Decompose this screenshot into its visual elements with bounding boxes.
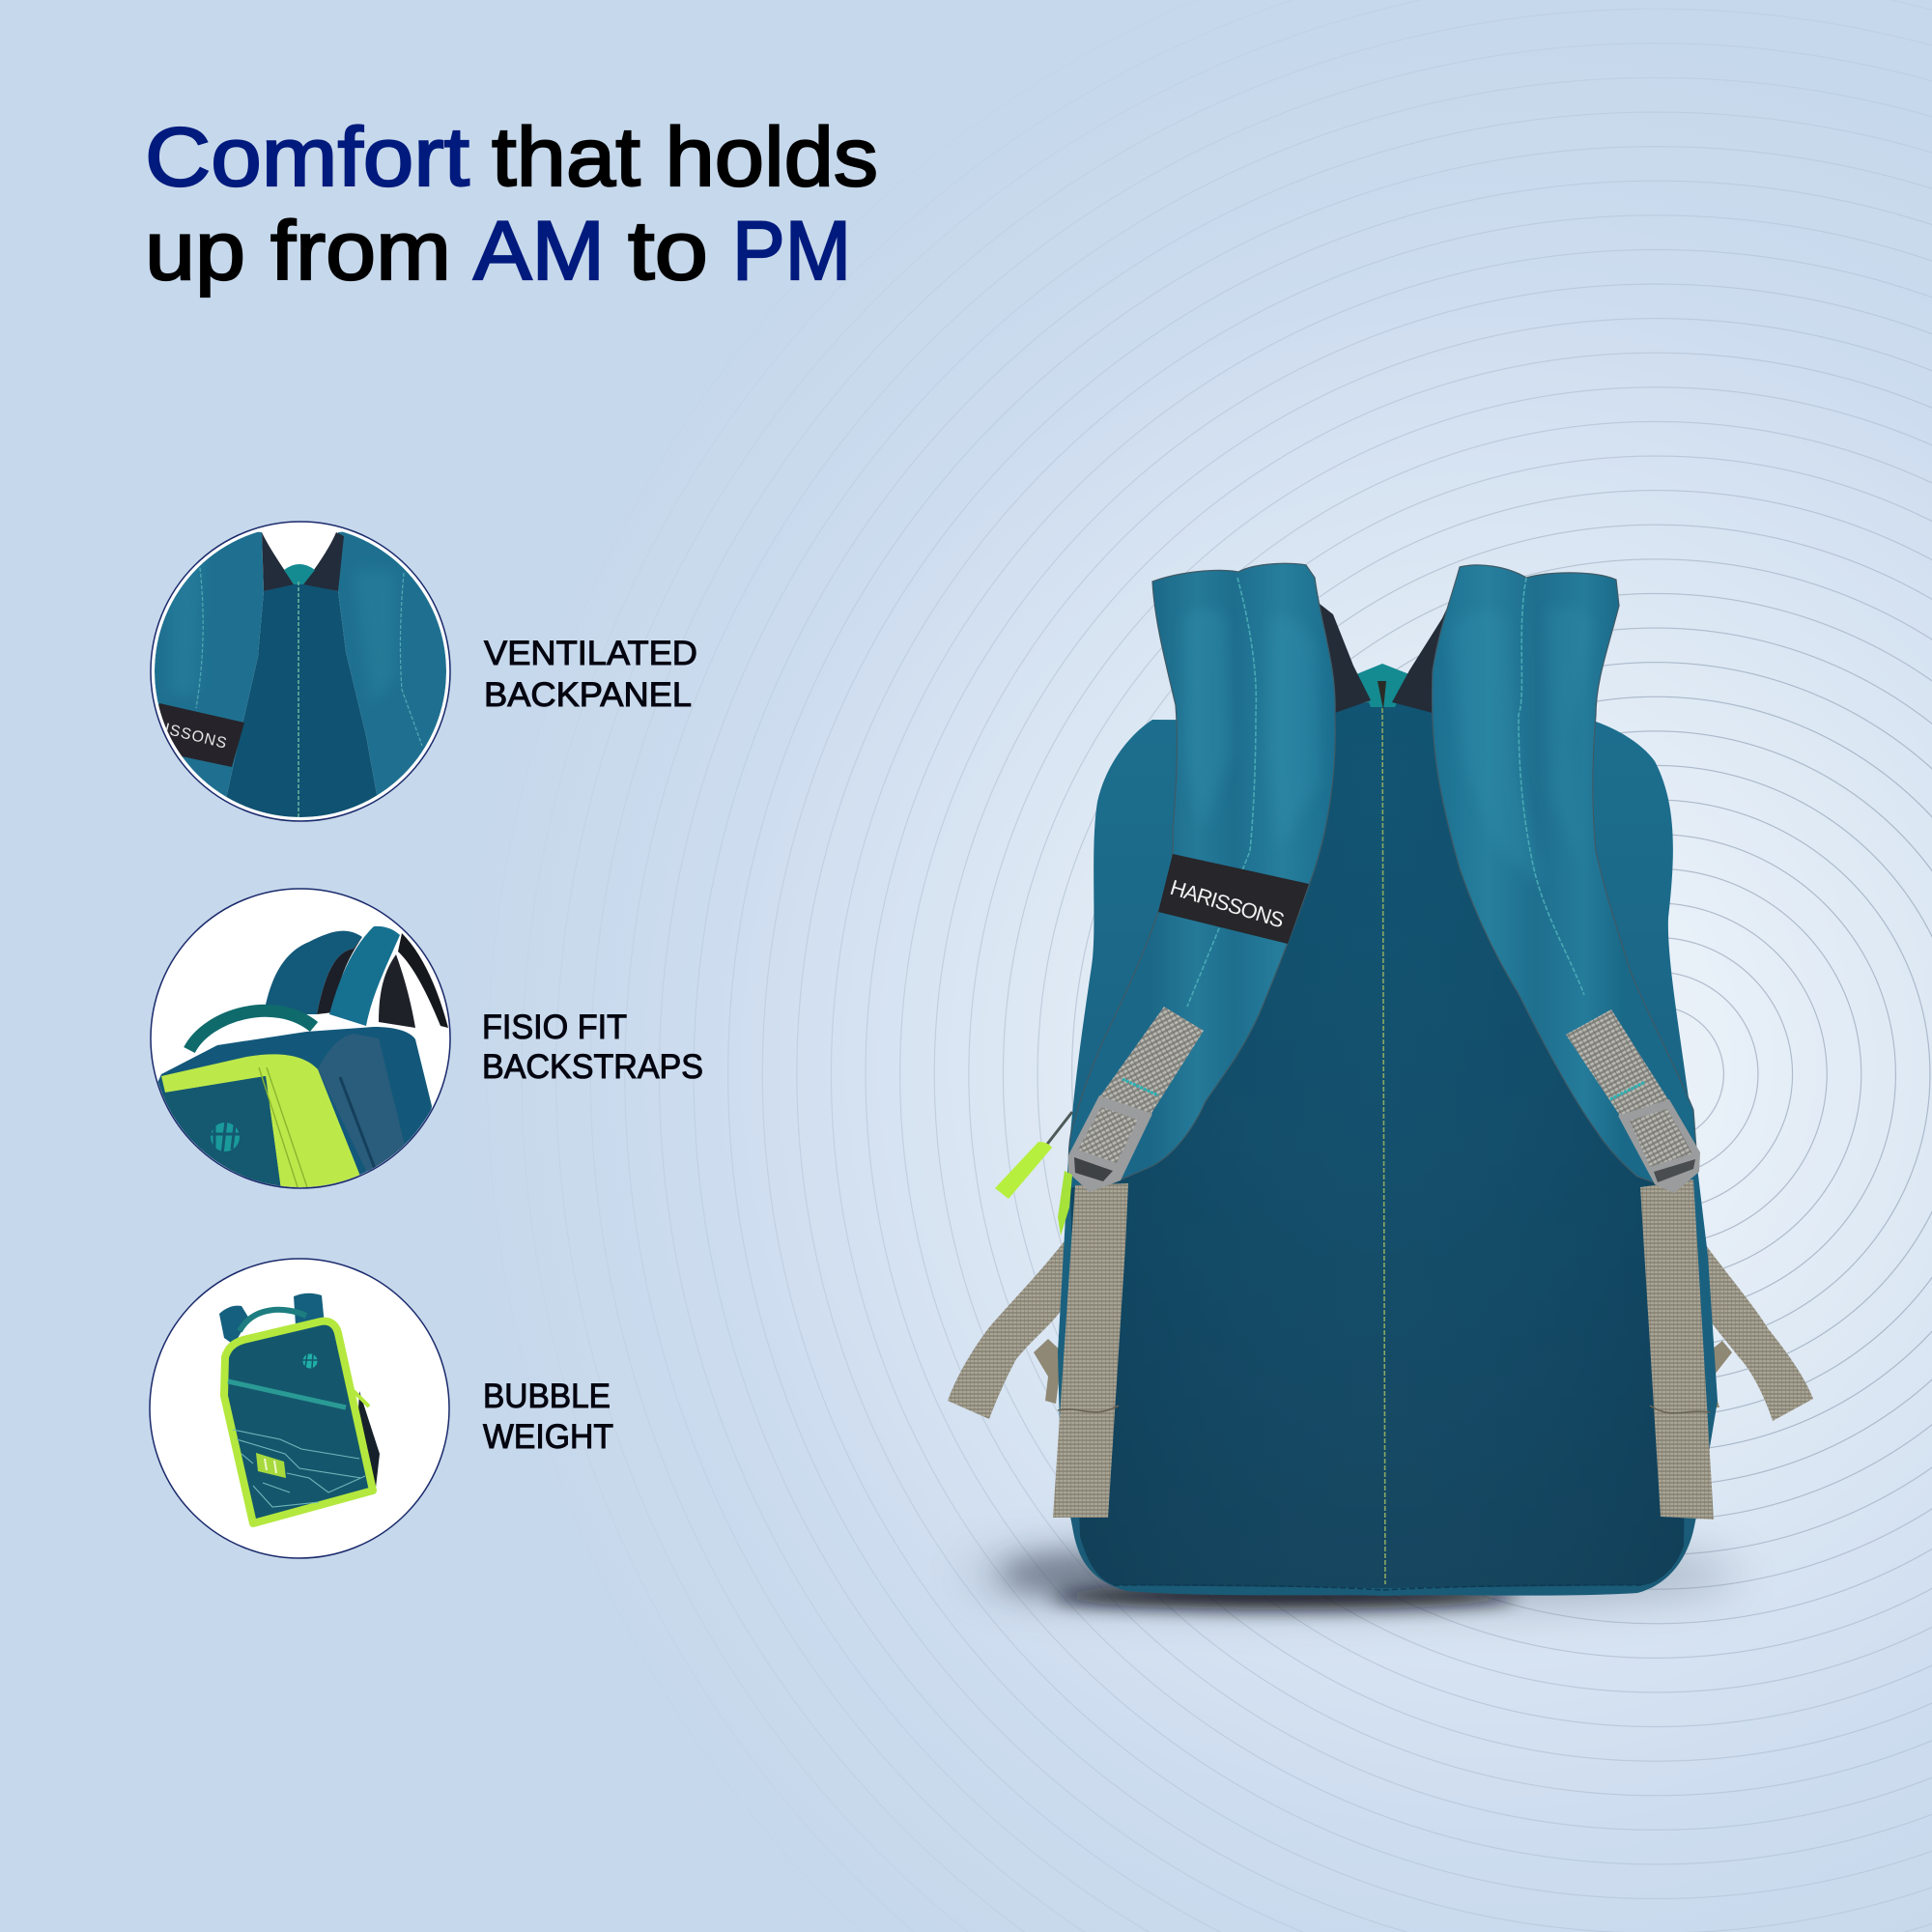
label: ventilated backpanel: VENTILATED bbox=[484, 635, 697, 672]
brand label bbox=[1158, 854, 1309, 944]
backpack body bbox=[1058, 720, 1718, 1596]
label: bubble weight: WEIGHT bbox=[483, 1418, 613, 1456]
left side loop strap bbox=[948, 1238, 1066, 1419]
circle: backstraps closeup bbox=[145, 889, 450, 1198]
title: PM bbox=[732, 205, 851, 298]
ground shadow bbox=[966, 1542, 1739, 1609]
dark mesh behind straps bbox=[1320, 604, 1449, 713]
title: AM bbox=[473, 205, 605, 298]
label: fisio fit backstraps: FISIO FIT bbox=[482, 1009, 627, 1046]
right buckle bbox=[1618, 1099, 1700, 1193]
left adjuster webbing bbox=[1099, 1007, 1204, 1115]
back panel bbox=[1070, 697, 1689, 1588]
left shoulder strap bbox=[1068, 563, 1335, 1190]
label: bubble weight: BUBBLE bbox=[483, 1378, 611, 1415]
label: ventilated backpanel: BACKPANEL bbox=[484, 676, 692, 714]
right adjuster webbing bbox=[1566, 1009, 1669, 1116]
feature 3: bubble weight bbox=[150, 1259, 613, 1558]
title: up from bbox=[145, 205, 451, 298]
circle: ventilated backpanel closeup: RISSONS bbox=[151, 718, 229, 753]
left lower webbing bbox=[1053, 1183, 1128, 1518]
brand label: HARISSONS bbox=[1168, 875, 1288, 932]
background concentric rings bbox=[624, 43, 1932, 1932]
circle: ventilated backpanel closeup bbox=[145, 522, 459, 821]
title: that holds bbox=[492, 111, 878, 204]
title: to bbox=[628, 205, 708, 298]
main backpack, rear view bbox=[948, 563, 1813, 1596]
label: fisio fit backstraps bbox=[482, 1009, 703, 1086]
title: Comfort bbox=[145, 111, 469, 204]
right shoulder strap bbox=[1432, 565, 1696, 1190]
circle: full front of backpack bbox=[150, 1259, 449, 1558]
center stitch bbox=[1382, 701, 1385, 1584]
label: bubble weight bbox=[483, 1378, 613, 1456]
right lower webbing bbox=[1640, 1179, 1714, 1520]
label: fisio fit backstraps: BACKSTRAPS bbox=[482, 1048, 703, 1086]
zipper pulls bbox=[995, 1112, 1072, 1236]
feature 2: fisio fit backstraps bbox=[145, 889, 703, 1198]
right side loop strap bbox=[1696, 1232, 1813, 1421]
title bbox=[145, 111, 878, 298]
feature 1: ventilated backpanel bbox=[145, 522, 697, 821]
left buckle bbox=[1068, 1095, 1152, 1192]
label: ventilated backpanel bbox=[484, 635, 697, 714]
bottom rim stitching bbox=[1114, 1585, 1642, 1590]
